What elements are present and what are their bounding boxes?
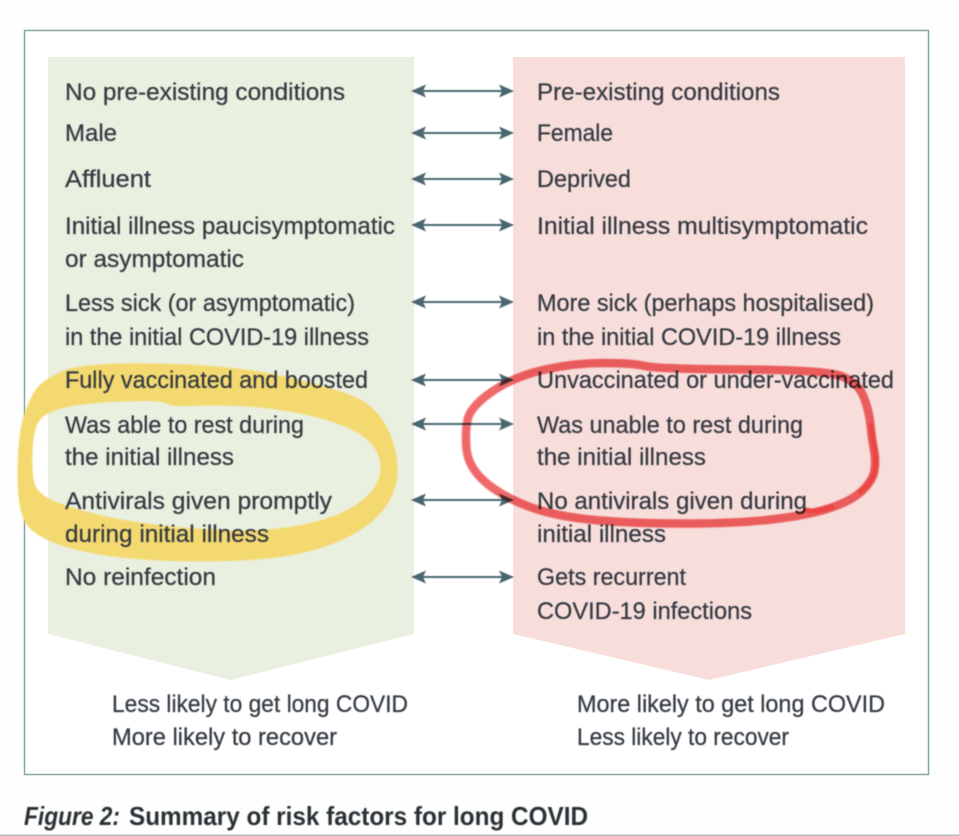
annotation: red hand-drawn circle [466, 363, 876, 524]
text: lower risk factor list: during initial illness [65, 521, 269, 548]
text: lower risk factor list: Initial illness paucisymptomatic [65, 213, 395, 240]
text: higher risk factor list: the initial illness [537, 444, 706, 471]
arrows: paired factor connectors [413, 91, 512, 577]
text: lower risk factor list: No reinfection [65, 564, 216, 591]
text: higher risk factor list: Gets recurrent [537, 564, 686, 591]
text: lower risk factor list [65, 79, 395, 591]
text: higher risk factor list: Initial illness multisymptomatic [537, 213, 868, 240]
text: lower risk factor list: No pre-existing conditions [65, 79, 345, 106]
text: higher risk factor list: in the initial COVID-19 illness [537, 324, 841, 351]
figure title: Figure 2: [24, 801, 120, 831]
caption: lower risk outcome: Less likely to get long COVID [112, 691, 408, 718]
caption: higher risk outcome: Less likely to recover [577, 724, 789, 751]
text: higher risk factor list: Pre-existing conditions [537, 79, 780, 106]
caption: lower risk outcome [112, 691, 408, 751]
text: higher risk factor list: Was unable to rest during [537, 412, 803, 439]
text: higher risk factor list: Female [537, 120, 613, 147]
text: lower risk factor list: or asymptomatic [65, 246, 244, 273]
text: lower risk factor list: the initial illness [65, 444, 234, 471]
text: higher risk factor list: No antivirals given during [537, 488, 807, 515]
text: lower risk factor list: Male [65, 120, 117, 147]
caption: lower risk outcome: More likely to recover [112, 724, 337, 751]
text: lower risk factor list: Less sick (or asymptomatic) [65, 290, 355, 317]
text: higher risk factor list: COVID-19 infections [537, 598, 752, 625]
annotation: yellow hand-drawn circle [17, 363, 398, 562]
text: higher risk factor list: initial illness [537, 521, 666, 548]
caption: higher risk outcome [577, 691, 885, 751]
text: higher risk factor list: Unvaccinated or under-vaccinated [537, 367, 894, 394]
text: lower risk factor list: in the initial COVID-19 illness [65, 324, 369, 351]
text: higher risk factor list: More sick (perhaps hospitalised) [537, 290, 874, 317]
text: higher risk factor list: Deprived [537, 166, 631, 193]
figure title: Summary of risk factors for long COVID [129, 801, 588, 831]
panel: higher risk background [513, 57, 905, 680]
text: lower risk factor list: Affluent [65, 166, 151, 193]
text: lower risk factor list: Fully vaccinated and boosted [65, 367, 368, 394]
text: lower risk factor list: Was able to rest during [65, 412, 304, 439]
text: higher risk factor list [537, 79, 894, 625]
caption: higher risk outcome: More likely to get long COVID [577, 691, 885, 718]
panel: lower risk background [48, 57, 414, 680]
text: lower risk factor list: Antivirals given promptly [65, 488, 333, 515]
